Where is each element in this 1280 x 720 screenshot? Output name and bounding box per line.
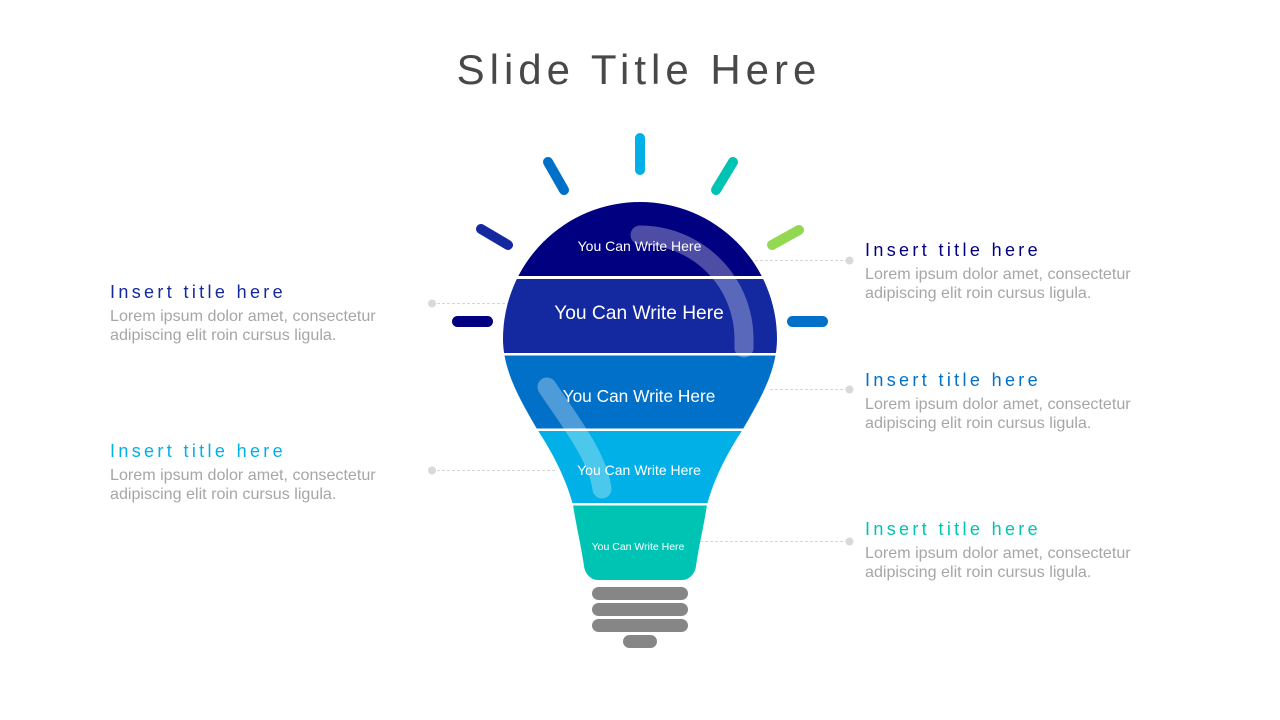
text block: left bottom: adipiscing elit roin cursus ligula.: [110, 485, 336, 503]
text block: right bottom: [865, 519, 1131, 581]
text block: right middle: Insert title here: [865, 370, 1041, 390]
text block: left top: Lorem ipsum dolor amet, consectetur: [110, 307, 376, 325]
text block: right top: [865, 240, 1131, 302]
text block: left bottom: Lorem ipsum dolor amet, consectetur: [110, 466, 376, 484]
text block: right middle: adipiscing elit roin cursus ligula.: [865, 414, 1091, 432]
bulb labels: You Can Write Here: [554, 303, 724, 324]
segment 1: [518, 202, 762, 276]
text block: left top: adipiscing elit roin cursus ligula.: [110, 326, 336, 344]
text block: right bottom: Lorem ipsum dolor amet, consectetur: [865, 544, 1131, 562]
bulb labels: You Can Write Here: [577, 462, 701, 478]
title: Slide Title Here: [457, 46, 821, 93]
bulb segments: [490, 200, 790, 582]
text block: right top: adipiscing elit roin cursus ligula.: [865, 284, 1091, 302]
text block: left top: [110, 282, 376, 344]
bulb labels: You Can Write Here: [578, 238, 702, 254]
segment 3: [490, 356, 790, 428]
text block: right top: Insert title here: [865, 240, 1041, 260]
text block: right bottom: Insert title here: [865, 519, 1041, 539]
bulb labels: You Can Write Here: [563, 386, 715, 406]
light rays: [458, 138, 822, 322]
segment 2: [490, 279, 790, 353]
light bulb diagram: [428, 133, 854, 648]
text block: right top: Lorem ipsum dolor amet, consectetur: [865, 265, 1131, 283]
bulb base: [592, 587, 688, 648]
text block: right bottom: adipiscing elit roin cursus ligula.: [865, 563, 1091, 581]
text block: left bottom: Insert title here: [110, 441, 286, 461]
connector lines: [428, 256, 854, 546]
text block: left top: Insert title here: [110, 282, 286, 302]
segment 4: [538, 431, 742, 503]
text block: left bottom: [110, 441, 376, 503]
bulb labels: You Can Write Here: [592, 541, 685, 553]
glass highlights: [547, 235, 744, 489]
text block: right middle: Lorem ipsum dolor amet, consectetur: [865, 395, 1131, 413]
segment 5: [573, 506, 707, 580]
bulb labels: [554, 238, 724, 553]
text block: right middle: [865, 370, 1131, 432]
